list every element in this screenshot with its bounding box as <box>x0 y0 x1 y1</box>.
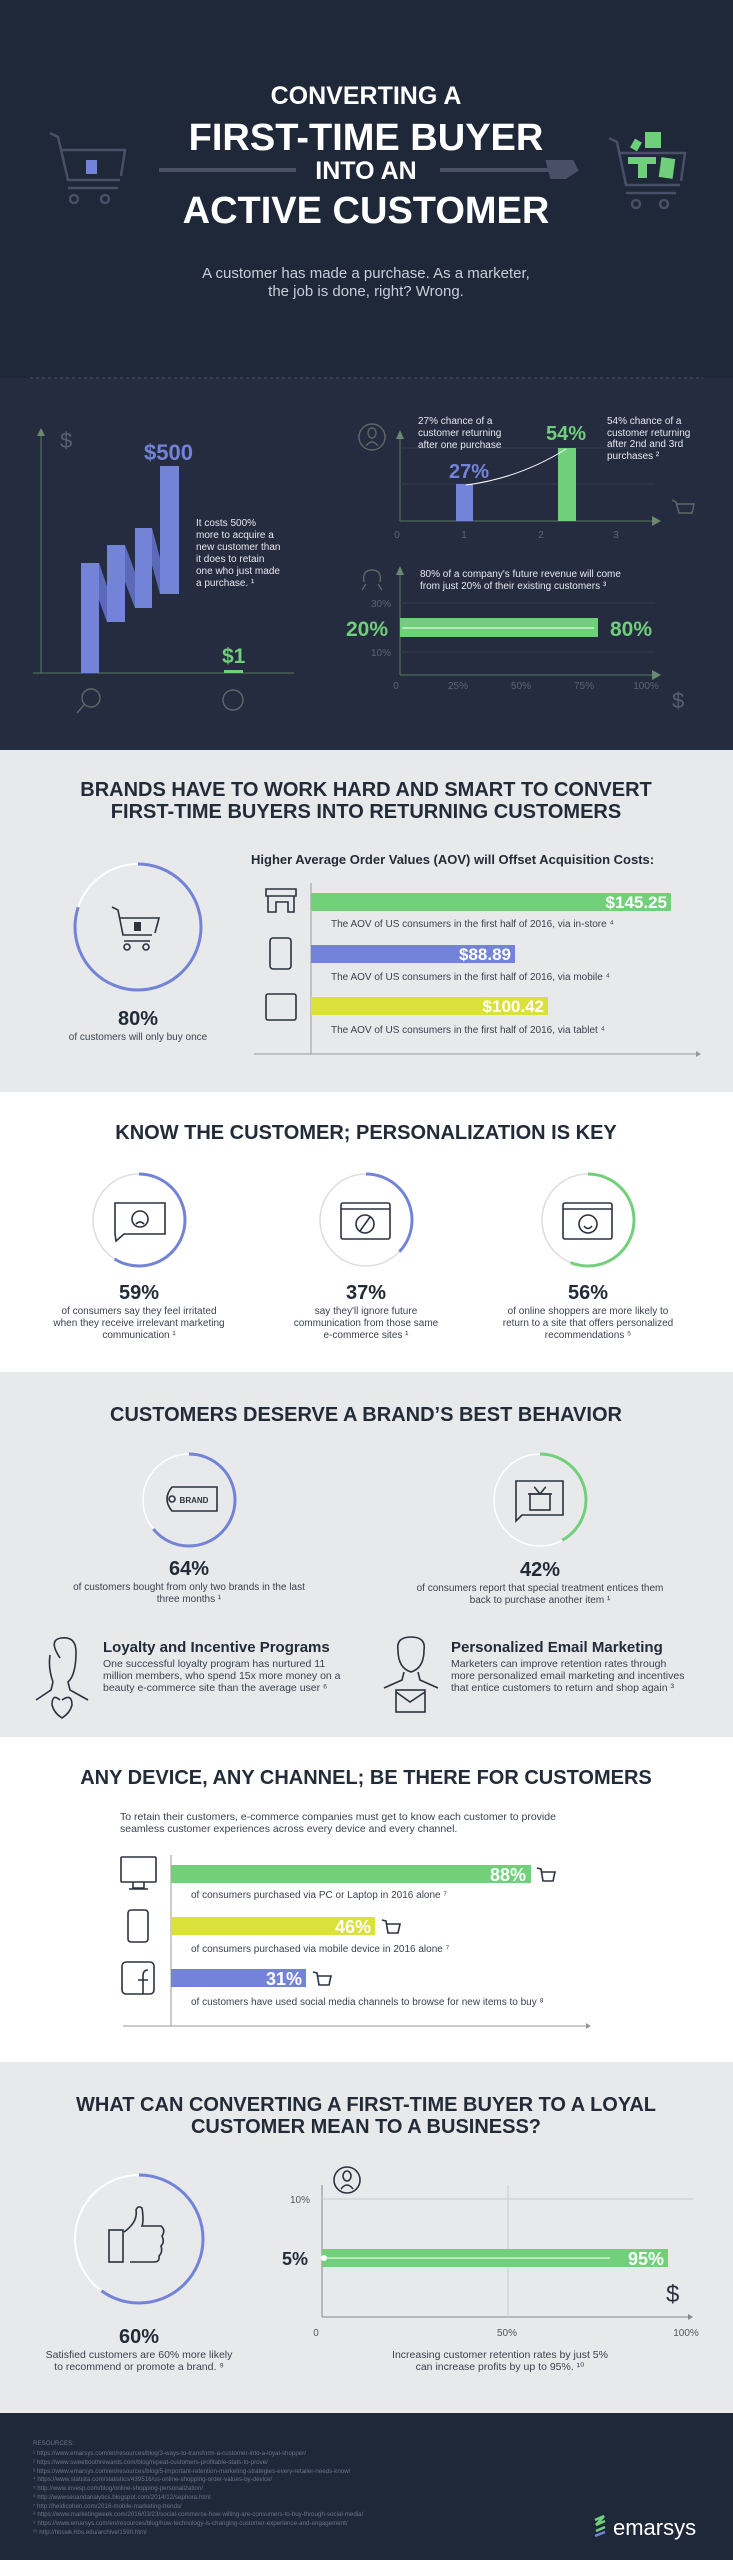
header background <box>0 0 733 378</box>
chart: acquisition cost: it does to retain <box>196 554 264 565</box>
icon: empty cart left <box>50 133 125 203</box>
chart: returning chance: 1 <box>461 530 467 541</box>
stat: 59% irritated: communication ¹ <box>102 1330 176 1341</box>
heading: what can converting mean <box>76 2094 656 2138</box>
chart: acquisition cost: It costs 500% <box>196 518 256 529</box>
footer resources: ⁶ http://wwwseoandanalytics.blogspot.com/2014/12/sephora.html <box>33 2494 211 2501</box>
footer background <box>0 2413 733 2560</box>
stat: 64% two brands: three months ¹ <box>157 1594 222 1605</box>
chart: 80/20 revenue: 30% <box>371 599 391 610</box>
block: loyalty programs: Loyalty and Incentive Programs <box>103 1639 330 1656</box>
chart: acquisition cost: $500 <box>144 440 193 465</box>
stat: 56% return: return to a site that offers personalized <box>503 1318 673 1329</box>
stat: 80% buy once <box>69 864 208 1043</box>
chart: retention profits: $ <box>666 2281 679 2308</box>
intro text <box>120 1811 556 1835</box>
title <box>183 82 549 232</box>
section 5 background <box>0 1372 733 1737</box>
stat: 37% ignore: say they'll ignore future <box>315 1306 418 1317</box>
stat: 42% special treatment: of consumers report that special treatment entices them <box>417 1583 663 1594</box>
stat: 59% irritated: when they receive irrelevant marketing <box>52 1318 225 1329</box>
stat: 37% ignore <box>294 1174 439 1341</box>
stat: 56% return: recommendations ⁵ <box>545 1330 631 1341</box>
heading: brands work hard <box>80 779 652 823</box>
chart: 80/20 revenue: 100% <box>633 681 659 692</box>
chart: retention profits: 0 <box>313 2328 319 2339</box>
title: FIRST-TIME BUYER <box>189 117 543 159</box>
chart: acquisition cost: $ <box>60 428 72 453</box>
stat: 80% buy once: 80% <box>118 1008 158 1030</box>
chart: 80/20 revenue: 50% <box>511 681 531 692</box>
chart: retention profits: 95% <box>628 2249 664 2269</box>
block: loyalty programs: million members, who spend 15x more money on a <box>103 1670 341 1682</box>
chart: acquisition cost: new customer than <box>196 542 280 553</box>
subtitle <box>202 265 530 300</box>
chart: AOV bars: The AOV of US consumers in the first half of 2016, via mobile ⁴ <box>331 972 610 983</box>
chart: AOV bars: $100.42 <box>483 997 544 1016</box>
stat: 60% satisfied: Satisfied customers are 60% more likely <box>46 2349 233 2361</box>
stat: 42% special treatment <box>417 1454 663 1606</box>
footer resources: ¹⁰ http://hbswk.hbs.edu/archive/1590.html <box>33 2529 147 2536</box>
stat: 56% return: of online shoppers are more likely to <box>508 1306 669 1317</box>
chart: 80/20 revenue: 25% <box>448 681 468 692</box>
block: personalized email: that entice customers to return and shop again ³ <box>451 1682 674 1694</box>
heading: know the customer: KNOW THE CUSTOMER; PERSONALIZATION IS KEY <box>115 1122 617 1144</box>
chart: device bars: 31% <box>266 1969 302 1989</box>
chart: acquisition cost <box>33 428 294 713</box>
stat: 37% ignore: communication from those same <box>294 1318 439 1329</box>
heading: brands work hard: BRANDS HAVE TO WORK HARD AND SMART TO CONVERT <box>80 779 652 801</box>
stat: 42% special treatment: back to purchase another item ¹ <box>470 1595 611 1606</box>
chart: returning chance: after 2nd and 3rd <box>607 439 683 450</box>
stat: 64% two brands <box>73 1454 305 1605</box>
subtitle: the job is done, right? Wrong. <box>268 283 464 300</box>
intro text: seamless customer experiences across every device and every channel. <box>120 1823 457 1835</box>
chart: device bars: 46% <box>335 1917 371 1937</box>
title: ACTIVE CUSTOMER <box>183 190 549 232</box>
chart: AOV bars: Higher Average Order Values (AOV) will Offset Acquisition Costs: <box>251 852 654 867</box>
stat: 59% irritated <box>52 1174 225 1341</box>
chart: 80/20 revenue: 0 <box>393 681 399 692</box>
block: personalized email <box>384 1637 684 1712</box>
footer resources: ⁸ https://www.marketingweek.com/2016/03/23/social-commerce-how-willing-are-consumers-to-buy-through-social-media/ <box>33 2511 364 2518</box>
heading: what can converting mean: CUSTOMER MEAN TO A BUSINESS? <box>191 2116 541 2138</box>
chart: AOV bars <box>251 852 701 1057</box>
chart: 80/20 revenue: $ <box>672 688 684 713</box>
chart: returning chance: 54% chance of a <box>607 416 682 427</box>
section 2 background <box>0 378 733 750</box>
chart: returning chance: purchases ² <box>607 451 660 462</box>
chart: returning chance: 27% <box>449 461 489 483</box>
chart: AOV bars: The AOV of US consumers in the first half of 2016, via in-store ⁴ <box>331 919 614 930</box>
subtitle: A customer has made a purchase. As a marketer, <box>202 265 530 282</box>
stat: 37% ignore: e-commerce sites ¹ <box>323 1330 409 1341</box>
chart: 80/20 revenue: from just 20% of their existing customers ³ <box>420 581 607 592</box>
stat: 56% return <box>503 1174 673 1341</box>
block: personalized email: Personalized Email Marketing <box>451 1639 663 1656</box>
footer resources: ⁹ https://www.emarsys.com/en/resources/blog/how-technology-is-changing-customer-experience-and-engagement/ <box>33 2520 348 2527</box>
heading: best behavior: CUSTOMERS DESERVE A BRAND’S BEST BEHAVIOR <box>110 1404 623 1426</box>
footer resources: ⁴ https://www.statista.com/statistics/439516/us-online-shopping-order-values-by-device/ <box>33 2476 273 2483</box>
chart: returning chance: 3 <box>613 530 619 541</box>
chart: acquisition cost: one who just made <box>196 566 280 577</box>
chart: AOV bars: The AOV of US consumers in the first half of 2016, via tablet ⁴ <box>331 1025 605 1036</box>
title: INTO AN <box>315 157 417 185</box>
chart: retention profits <box>282 2167 699 2373</box>
chart: acquisition cost: a purchase. ¹ <box>196 578 255 589</box>
chart: device bars: of consumers purchased via PC or Laptop in 2016 alone ⁷ <box>191 1890 447 1901</box>
stat: 64% two brands: of customers bought from only two brands in the last <box>73 1582 305 1593</box>
stat: 60% satisfied: 60% <box>119 2326 159 2348</box>
footer resources: ⁵ http://www.invesp.com/blog/online-shopping-personalization/ <box>33 2485 203 2492</box>
chart: retention profits: 100% <box>673 2328 699 2339</box>
chart: device bars: 88% <box>490 1865 526 1885</box>
chart: returning chance <box>359 416 694 541</box>
section 3 background <box>0 750 733 1092</box>
chart: 80/20 revenue: 10% <box>371 648 391 659</box>
chart: device bars <box>121 1855 591 2029</box>
chart: 80/20 revenue: 75% <box>574 681 594 692</box>
footer resources: ³ https://www.emarsys.com/en/resources/blog/5-important-retention-marketing-strategies-every-retailer-needs-know/ <box>33 2468 351 2475</box>
chart: returning chance: 0 <box>394 530 400 541</box>
chart: acquisition cost: $1 <box>222 645 246 668</box>
chart: retention profits: Increasing customer retention rates by just 5% <box>392 2349 608 2361</box>
heading: any device: ANY DEVICE, ANY CHANNEL; BE THERE FOR CUSTOMERS <box>80 1767 652 1789</box>
chart: retention profits: 10% <box>290 2195 310 2206</box>
chart: AOV bars: $145.25 <box>606 893 667 912</box>
footer resources: RESOURCES: <box>33 2440 74 2447</box>
stat: 64% two brands: BRAND <box>180 1496 209 1505</box>
stat: 64% two brands: 64% <box>169 1558 209 1580</box>
arrow: title line <box>159 162 576 177</box>
chart: device bars: of consumers purchased via mobile device in 2016 alone ⁷ <box>191 1944 450 1955</box>
chart: device bars: of customers have used social media channels to browse for new items to buy ⁸ <box>191 1997 544 2008</box>
footer resources: ¹ https://www.emarsys.com/en/resources/blog/3-ways-to-transform-a-customer-into-a-loyal-shopper/ <box>33 2450 306 2457</box>
chart: retention profits: 50% <box>497 2328 517 2339</box>
chart: returning chance: customer returning <box>607 428 690 439</box>
heading: brands work hard: FIRST-TIME BUYERS INTO RETURNING CUSTOMERS <box>111 801 621 823</box>
chart: 80/20 revenue <box>346 566 684 713</box>
logo: emarsys: emarsys <box>613 2515 696 2540</box>
stat: 42% special treatment: 42% <box>520 1559 560 1581</box>
intro text: To retain their customers, e-commerce companies must get to know each customer to provide <box>120 1811 556 1823</box>
chart: returning chance: customer returning <box>418 428 501 439</box>
stat: 80% buy once: of customers will only buy once <box>69 1032 208 1043</box>
chart: acquisition cost: more to acquire a <box>196 530 274 541</box>
stat: 59% irritated: 59% <box>119 1282 159 1304</box>
chart: returning chance: after one purchase <box>418 440 502 451</box>
icon: full cart right <box>609 132 685 208</box>
stat: 56% return: 56% <box>568 1282 608 1304</box>
stat: 59% irritated: of consumers say they feel irritated <box>61 1306 217 1317</box>
section 7 background <box>0 2062 733 2413</box>
chart: returning chance: 54% <box>546 423 586 445</box>
chart: AOV bars: $88.89 <box>459 945 511 964</box>
block: personalized email: more personalized email marketing and incentives <box>451 1670 684 1682</box>
chart: 80/20 revenue: 80% <box>610 618 652 641</box>
chart: returning chance: 27% chance of a <box>418 416 493 427</box>
footer resources: ² https://www.sweettoothrewards.com/blog/repeat-customers-profitable-stats-to-prove/ <box>33 2459 268 2466</box>
chart: 80/20 revenue: 20% <box>346 618 388 641</box>
stat: 60% satisfied: to recommend or promote a brand. ⁹ <box>54 2361 224 2373</box>
stat: 60% satisfied <box>46 2175 233 2373</box>
chart: retention profits: 5% <box>282 2249 308 2269</box>
heading: what can converting mean: WHAT CAN CONVERTING A FIRST-TIME BUYER TO A LOYAL <box>76 2094 656 2116</box>
block: loyalty programs: One successful loyalty program has nurtured 11 <box>103 1658 325 1670</box>
block: loyalty programs: beauty e-commerce site than the average user ⁶ <box>103 1682 327 1694</box>
chart: returning chance: 2 <box>538 530 544 541</box>
footer resources <box>33 2440 364 2536</box>
chart: retention profits: can increase profits by up to 95%. ¹⁰ <box>416 2361 585 2373</box>
block: personalized email: Marketers can improve retention rates through <box>451 1658 667 1670</box>
footer resources: ⁷ http://heidicohen.com/2016-mobile-marketing-trends/ <box>33 2503 182 2510</box>
chart: 80/20 revenue: 80% of a company's future revenue will come <box>420 569 621 580</box>
title: CONVERTING A <box>271 82 461 110</box>
block: loyalty programs <box>36 1638 341 1718</box>
stat: 37% ignore: 37% <box>346 1282 386 1304</box>
